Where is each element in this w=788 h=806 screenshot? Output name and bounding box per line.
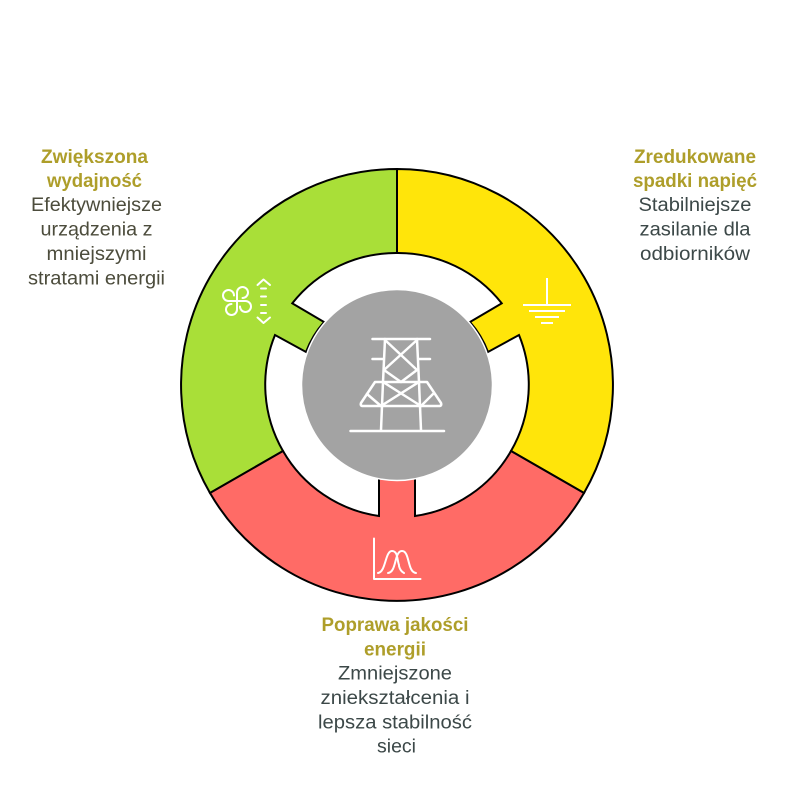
body: bottom description: sieci: [377, 736, 416, 758]
body: left description: mniejszymi: [46, 244, 146, 265]
icon: ground symbol: [523, 278, 571, 323]
heading: Zwiększona wydajność: [41, 147, 148, 192]
heading: Poprawa jakości energii: Poprawa jakości: [322, 615, 468, 636]
segment: red: [210, 451, 584, 601]
icon: transmission tower: [350, 339, 444, 431]
heading: Zredukowane spadki napięć: spadki napięć: [633, 171, 757, 192]
body: right description: Stabilniejsze: [638, 195, 752, 216]
heading: Poprawa jakości energii: energii: [364, 640, 426, 660]
body: bottom description: lepsza stabilność: [318, 712, 472, 734]
body: left description: stratami energii: [28, 268, 165, 290]
body: right description: odbiorników: [640, 244, 750, 265]
heading: Zredukowane spadki napięć: [633, 147, 757, 192]
icon: fan and vertical arrows: [223, 280, 270, 323]
heading: Zredukowane spadki napięć: Zredukowane: [634, 147, 756, 168]
body: left description: urządzenia z: [40, 220, 152, 240]
text: bottom block: [318, 615, 472, 758]
body: bottom description: [318, 664, 472, 758]
heading: Zwiększona wydajność: wydajność: [46, 171, 142, 192]
segment: green: [181, 169, 397, 493]
body: bottom description: zniekształcenia i: [320, 688, 470, 709]
body: left description: [28, 195, 165, 290]
body: right description: [638, 195, 752, 265]
body: right description: zasilanie dla: [640, 220, 751, 240]
center circle: [302, 290, 492, 480]
heading: Zwiększona wydajność: Zwiększona: [41, 147, 148, 168]
heading: Poprawa jakości energii: [322, 615, 468, 660]
diagram: segmented ring: [181, 169, 613, 601]
icon: bell curves chart: [374, 538, 420, 579]
body: left description: Efektywniejsze: [31, 195, 162, 216]
segment: yellow: [397, 169, 613, 493]
text: left block: [28, 147, 165, 290]
text: right block: [633, 147, 757, 265]
body: bottom description: Zmniejszone: [338, 664, 452, 684]
